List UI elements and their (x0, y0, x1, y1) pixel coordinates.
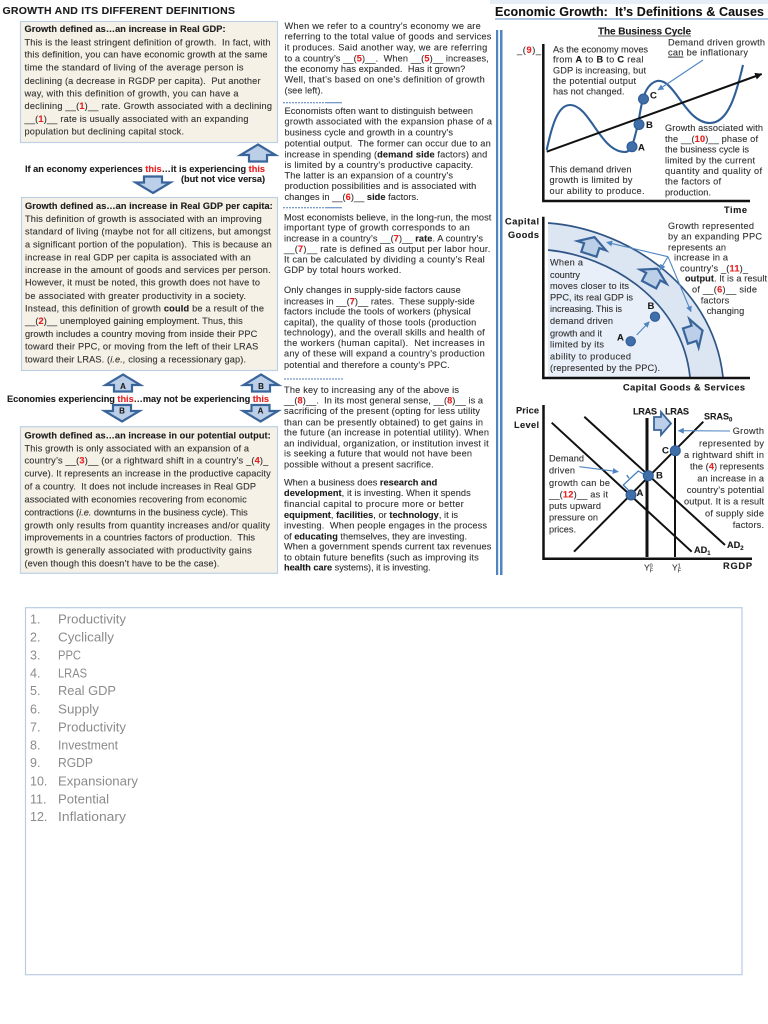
point A: A (636, 488, 644, 499)
annotation: moving closer to PPC: increasing. This is (550, 304, 622, 314)
arrow from A to B (637, 322, 649, 335)
annotation: A to B to C (553, 44, 648, 97)
panel text: potential output: of a country. It does not include increases in Real GDP (24, 482, 256, 492)
panel: growth as real GDP (20, 22, 278, 142)
panel: growth as potential output (20, 427, 278, 573)
implication statement: if this then this (25, 164, 265, 184)
text block: investment definition: is seeking a future that would not have been (284, 449, 472, 459)
annotation: moving closer to PPC: demand driven (550, 316, 613, 326)
panel text: real GDP per capita: toward their PPC, or moving from the left of their LRAS (25, 342, 258, 352)
panel text: real GDP: declining (a decrease in RGDP per capita). Put another (24, 76, 260, 86)
text block: investment definition: sacrificing of the present (opting for less utility (284, 406, 480, 416)
text block: what the economy means: Well, that’s based on one’s definition of growth (284, 75, 485, 85)
axes (543, 217, 750, 378)
SRAS label: SRAS (704, 412, 729, 422)
icon: up arrow A (106, 374, 140, 392)
double vertical divider (496, 30, 502, 575)
text block: forms of investing (284, 478, 492, 573)
point C (638, 90, 657, 104)
axes (543, 44, 750, 201)
text block: what the economy means: the economy has expanded. Has it grown? (284, 64, 465, 74)
y-axis label: price level (514, 406, 539, 430)
answer list: 11. (30, 792, 46, 806)
text block: productivity: GDP by total hours worked. (284, 265, 401, 275)
AD2 label: 2 (740, 546, 744, 552)
answer list: 7. (30, 720, 40, 734)
panel heading: real GDP: Growth defined as…an increase in Real GDP: (24, 24, 226, 34)
answer list: Productivity (58, 720, 127, 734)
text block: productivity: increase in a country’s __(7)__ rate. A country’s (284, 233, 483, 243)
shaded region outer (548, 223, 723, 378)
annotation: expansionary limit: production. (665, 187, 711, 197)
point B: B (648, 301, 654, 312)
x-axis label: RGDP: RGDP (723, 561, 752, 571)
text block: what the economy means: referring to the total value of goods and services (284, 31, 492, 41)
text block: forms of investing: financial capital to procure more or better (284, 499, 464, 509)
answer list (30, 612, 139, 824)
point B (634, 120, 653, 131)
text block: productivity (283, 212, 492, 275)
AD1 line (552, 423, 692, 552)
LRAS labels: LRAS (633, 407, 657, 417)
annotation: expansionary limit (665, 123, 763, 197)
annotation: rightward shift: Growth (733, 426, 764, 436)
annotation: expanding PPC: changing (707, 306, 744, 316)
text block: demand versus supply side: The latter is an expansion of a country’s (284, 171, 453, 181)
text block: forms of investing: of educating themselves, they are investing. (284, 532, 467, 542)
annotation: demand driven: __(12)__ as it (548, 489, 608, 499)
panel text: real GDP per capita: However, it must be noted, this growth does not have to (25, 278, 260, 288)
annotation: inflationary: can be inflationary (668, 48, 748, 58)
y-axis label: capital goods: Capital (505, 217, 539, 227)
text block: productivity: It can be calculated by dividing a county’s Real (284, 254, 485, 264)
panel text: real GDP per capita: be associated with greater productivity in a society. (25, 291, 246, 301)
annotation: expansionary limit: Growth associated with (665, 123, 763, 133)
text block: forms of investing: equipment, facilities, or technology, it is (284, 510, 458, 520)
panel text: real GDP per capita: a significant portion of the population). This is because an (25, 239, 272, 249)
annotation: demand driven: prices. (549, 524, 576, 534)
panel text: real GDP per capita: increase in real GDP per capita is associated with an (25, 252, 251, 262)
annotation: expanding PPC: represents an (668, 243, 726, 253)
answer list: LRAS (58, 666, 87, 680)
text block: productivity: Most economists believe, in the long-run, the most (284, 212, 492, 222)
arrow to point C (658, 60, 703, 90)
AD1 label: 1 (707, 551, 711, 557)
SRAS label: 0 (729, 418, 733, 424)
annotation: A to B to C: from A to B to C real (553, 55, 644, 65)
answer list: 12. (30, 810, 47, 824)
answer list: RGDP (58, 756, 93, 770)
answer list: Productivity (58, 612, 127, 626)
text block: what the economy means: to a country’s __(5)__. When __(5)__ increases, (284, 53, 489, 63)
panel text: real GDP: this definition, you can have economic growth at the same (24, 50, 268, 60)
text block: supply-side factors: the workers (human capital). Net increases in (284, 338, 485, 348)
LRAS labels: LRAS (665, 407, 689, 417)
annotation: expanding PPC: increase in a (674, 253, 729, 263)
text block: demand versus supply side: potential output. The former can occur due to an (284, 138, 491, 148)
panel text: real GDP: This is the least stringent definition of growth. In fact, with (24, 37, 270, 47)
panel heading: potential output: Growth defined as…an increase in our potential output: (24, 431, 271, 441)
icon: down arrow B (104, 405, 140, 422)
annotation: expanding PPC: output. It is a result (685, 274, 767, 284)
panel text: real GDP per capita: This definition of growth is associated with an improving (25, 214, 262, 224)
answer list: 3. (30, 648, 40, 662)
tick label: Y0: 0 (650, 564, 653, 570)
text block: supply-side factors: Only changes in supply-side factors cause (284, 285, 461, 295)
panel text: potential output: country’s __(3)__ (or a rightward shift in a country’s _(4)_ (24, 456, 269, 466)
implication statement: if this then this: (but not vice versa) (181, 174, 265, 184)
text block: supply-side factors: factors include the tools of workers (physical (284, 307, 471, 317)
annotation: rightward shift: output. It is a result (684, 497, 764, 507)
annotation: rightward shift: the (4) represents (690, 462, 764, 472)
shaded region inner (548, 250, 690, 378)
text block: supply-side factors: increases in __(7)__ rates. These supply-side (284, 296, 475, 306)
x-axis label: time: Time (724, 205, 747, 215)
icon: up arrow between definitions (240, 144, 276, 162)
point C (662, 446, 680, 456)
answer list: 9. (30, 756, 40, 770)
icon: up arrow B (244, 374, 278, 392)
text block: demand versus supply side: increase in spending (demand side factors) and (284, 149, 487, 159)
y-axis label: blank 9: _(9)_ (516, 45, 542, 55)
text block: investment definition: The key to increasing any of the above is (284, 385, 459, 395)
panel text: real GDP: declining __(1)__ rate. Growth associated with a declining (24, 101, 272, 111)
annotation: A to B to C: As the economy moves (553, 44, 648, 54)
chart title: the business cycle: The Business Cycle (598, 26, 691, 38)
annotation: inflationary (668, 37, 765, 58)
text block: investment definition: possible without a present sacrifice. (284, 460, 434, 470)
text block: demand versus supply side: Economists often want to distinguish between (284, 106, 473, 116)
text block: what the economy means: it produces. Said another way, we are referring (284, 42, 487, 52)
annotation: rightward shift: country’s potential (687, 485, 764, 495)
y-axis label: price level: Price (516, 406, 539, 416)
text block: supply-side factors (284, 285, 485, 370)
point A (617, 332, 635, 346)
point A: A (638, 142, 645, 154)
annotation: moving closer to PPC: (represented by the PPC). (550, 363, 660, 373)
arrow to LRAS shift (678, 430, 730, 432)
panel text: real GDP: __(1)__ rate is usually associated with an expanding (24, 114, 248, 124)
text block: investment definition: __(8)__. In its most general sense, __(8)__ is a (283, 396, 484, 406)
chart: aggregate demand and supply (514, 405, 765, 574)
annotation: expansionary limit: the factors of (665, 177, 721, 187)
panel text: potential output: (even though this doesn’t have to be the case). (24, 559, 219, 569)
text block: demand versus supply side: growth associated with the expansion phase of a (284, 117, 493, 127)
answer list: Potential (58, 792, 109, 806)
point B: B (656, 470, 663, 482)
annotation: moving closer to PPC: ability to produced (550, 352, 631, 362)
text block: forms of investing: When a government spends current tax revenues (284, 542, 492, 552)
point A (626, 488, 644, 500)
y-axis label: capital goods: Goods (508, 230, 539, 240)
text block: supply-side factors: capital), the quality of those tools (production (284, 317, 476, 327)
panel text: real GDP: way, with this definition of growth, you can have a (24, 88, 239, 98)
text block: forms of investing: to obtain future benefits (such as improving its (284, 552, 479, 562)
panel text: potential output: growth only results from quantity increases and/or quality (24, 520, 270, 530)
answer list: 8. (30, 738, 40, 752)
x-axis label: capital goods and services: Capital Goods & Services (623, 383, 745, 393)
annotation: demand driven: puts upward (549, 501, 601, 511)
annotation: rightward shift: an increase in a (697, 473, 765, 483)
arrow to bracket (579, 467, 618, 472)
business cycle curve (547, 65, 743, 152)
annotation: rightward shift: of supply side (705, 508, 764, 518)
annotation: demand driven: Demand (549, 453, 584, 463)
answer list: Inflationary (58, 810, 127, 824)
annotation: expansionary limit: the business cycle is (665, 145, 749, 155)
annotation: demand driven limit: This demand driven (550, 164, 632, 174)
answer list: Supply (58, 702, 100, 716)
annotation: moving closer to PPC: limited by its (550, 339, 604, 349)
icon: down arrow B: B (119, 406, 125, 416)
annotation: moving closer to PPC: country (550, 270, 580, 280)
annotation: demand driven limit (550, 164, 644, 196)
icon: up arrow B: B (258, 382, 264, 391)
annotation: expanding PPC: factors (701, 296, 730, 306)
text block: demand versus supply side (284, 106, 493, 202)
answer list: PPC (58, 648, 81, 662)
annotation: expanding PPC (668, 221, 767, 316)
icon: expansion arrow 1 (575, 233, 609, 259)
annotation: expansionary limit: the __(10)__ phase of (665, 134, 758, 144)
PPC curves (548, 223, 723, 377)
annotation: expanding PPC: country’s _(11)_ (680, 263, 749, 273)
panel text: real GDP per capita: standard of living (maybe not for all citizens, but amongst (25, 226, 271, 236)
annotation: expanding PPC: Growth represented (668, 221, 754, 231)
text block: forms of investing: development, it is investing. When it spends (284, 488, 471, 498)
answer list: Cyclically (58, 630, 115, 644)
icon: expansion arrow 3 (681, 316, 707, 350)
annotation: A to B to C: has not changed. (553, 87, 624, 97)
tick label: Y1: Y (672, 562, 678, 572)
icon: down arrow A: A (258, 406, 264, 416)
icon: up arrow A: A (120, 382, 126, 391)
text block: investment definition (283, 385, 489, 470)
text block: supply-side factors: potential and therefore a county’s PPC. (284, 360, 450, 370)
text block: investment definition: the future (an increase in potential utility). When (284, 428, 489, 438)
annotation: rightward shift: factors. (733, 520, 764, 530)
point A (627, 142, 645, 154)
AD2 line (584, 417, 725, 545)
text block: what the economy means: When we refer to a country’s economy we are (284, 21, 481, 31)
answer list: 2. (30, 630, 40, 644)
text block: what the economy means (284, 21, 492, 95)
text block: forms of investing: investing. When people engages in the process (284, 521, 487, 531)
answer list: 1. (30, 612, 40, 626)
annotation: rightward shift: represented by (699, 438, 764, 448)
panel: growth as real GDP per capita (22, 198, 278, 370)
chart: the business cycle (516, 26, 765, 215)
SRAS line (574, 422, 703, 552)
y-axis label: price level: Level (514, 420, 539, 430)
answer list: 4. (30, 666, 40, 680)
implication statement: if this then this: If an economy experiences this…it is experiencing this (25, 164, 265, 174)
annotation: moving closer to PPC: PPC, its real GDP is (550, 293, 633, 303)
icon: down arrow between definitions (136, 176, 170, 193)
tick label: Y0: F (650, 568, 654, 574)
text block: demand versus supply side: business cycle and growth in a country’s (284, 127, 453, 137)
main title: growth and its different definitions: GROWTH AND ITS DIFFERENT DEFINITIONS (2, 5, 235, 17)
answer list: 6. (30, 702, 40, 716)
annotation: demand driven limit: growth is limited by (550, 175, 633, 185)
panel text: real GDP: time the standard of living of the average person is (24, 63, 244, 73)
annotation: moving closer to PPC: moves closer to its (550, 281, 629, 291)
icon: LRAS shift arrow (654, 412, 671, 435)
text block: supply-side factors: any of these will expand a country’s production (284, 349, 485, 359)
LRAS lines (647, 418, 675, 557)
panel text: real GDP per capita: Instead, this definition of growth could be a result of the (25, 303, 264, 313)
annotation: moving closer to PPC (550, 257, 660, 373)
annotation: A to B to C: the potential output (553, 76, 636, 86)
comparison statement: may not be experiencing: Economies experiencing this…may not be experiencing this (7, 394, 269, 404)
panel text: real GDP per capita: growth includes a country moving from inside their PPC (25, 329, 258, 339)
icon: expansion arrow 2 (636, 262, 671, 292)
panel text: potential output: curve). It represents an increase in the productive capacity (24, 469, 271, 479)
text block: demand versus supply side: changes in __(6)__ side factors. (284, 192, 419, 202)
pointer arrows (607, 242, 691, 312)
panel text: potential output: associated with economies recovering from economic (24, 494, 247, 504)
point A: A (617, 332, 624, 344)
AD2 label: AD (727, 540, 740, 550)
panel text: potential output: improvements in a countries factors of production. This (24, 533, 255, 543)
panel text: real GDP per capita (24, 214, 272, 364)
annotation: demand driven: pressure on (549, 512, 598, 522)
answer list: Real GDP (58, 684, 116, 698)
icon: down arrow A (243, 405, 278, 422)
annotation: inflationary: Demand driven growth (668, 37, 765, 47)
panel: answer key (26, 608, 742, 975)
annotation: expansionary limit: quantity and quality of (665, 166, 762, 176)
answer list: Expansionary (58, 774, 139, 788)
panel text: potential output (24, 443, 271, 569)
annotation: rightward shift (684, 426, 765, 530)
answer list: Investment (58, 738, 119, 752)
tick label: Y1: 1 (678, 564, 681, 570)
potential output trend arrow (547, 74, 762, 152)
panel heading: real GDP per capita: Growth defined as…an increase in Real GDP per capita: (25, 201, 273, 211)
text block: productivity: __(7)__ rate is defined as output per labor hour. (283, 244, 490, 254)
annotation: demand driven (548, 453, 610, 534)
answer list: 5. (30, 684, 40, 698)
annotation: expanding PPC: of __(6)__ side (692, 285, 757, 295)
annotation: demand driven: growth can be (549, 478, 610, 488)
annotation: demand driven limit: our ability to produce. (550, 186, 644, 196)
panel text: potential output: contractions (i.e. downturns in the business cycle). This (24, 507, 248, 517)
point C: C (650, 90, 657, 102)
annotation: expansionary limit: limited by the current (665, 155, 755, 165)
panel text: potential output: growth is generally associated with productivity gains (24, 546, 252, 556)
panel text: real GDP per capita: __(2)__ unemployed gaining employment. Thus, this (24, 316, 243, 326)
tick label: Y0: Y (644, 562, 650, 572)
text block: demand versus supply side: is limited by a country’s productive capacity. (284, 160, 473, 170)
annotation: demand driven: driven (549, 466, 575, 476)
text block: supply-side factors: technology), and the overall skills and health of (284, 327, 485, 337)
LRAS labels (633, 407, 689, 417)
text block: what the economy means: (see left). (284, 85, 323, 95)
answer list: 10. (30, 774, 47, 788)
panel text: real GDP per capita: increase in the amount of goods and services per person. (25, 265, 271, 275)
axes (544, 405, 752, 559)
annotation: A to B to C: GDP is increasing, but (553, 65, 646, 75)
chart: production possibilities curve (505, 217, 767, 393)
text block: productivity: important type of growth corresponds to an (284, 223, 470, 233)
text block: forms of investing: health care systems), it is investing. (284, 563, 431, 573)
text column: economy and growth explanation (283, 21, 493, 573)
point C: C (662, 446, 669, 456)
annotation: moving closer to PPC: When a (550, 257, 584, 267)
point B (648, 301, 660, 321)
point B (643, 470, 663, 482)
text block: investment definition: an individual, organization, or institution invest it (284, 438, 489, 448)
point B: B (646, 120, 653, 131)
panel text: potential output: This growth is only associated with an expansion of a (24, 443, 250, 453)
annotation: moving closer to PPC: growth and it (550, 328, 602, 338)
annotation: rightward shift: a rightward shift in (684, 450, 764, 460)
AD1 label: AD (694, 545, 707, 555)
tick label: Y1: F (678, 568, 682, 574)
text block: investment definition: than can be presently obtained) to get gains in (284, 418, 483, 428)
right column title: Economic Growth: It’s Definitions & Causes (495, 5, 764, 19)
text block: demand versus supply side: production possibilities and is associated with (284, 181, 476, 191)
demand bracket (623, 471, 645, 490)
annotation: expanding PPC: by an expanding PPC (668, 231, 762, 241)
y-axis label: capital goods (505, 217, 539, 240)
panel text: real GDP: population but declining capital stock. (24, 126, 184, 136)
panel text: real GDP (24, 37, 272, 136)
text block: forms of investing: When a business does research and (284, 478, 437, 488)
panel text: real GDP per capita: toward their LRAS. (i.e., closing a recessionary gap). (25, 354, 246, 364)
